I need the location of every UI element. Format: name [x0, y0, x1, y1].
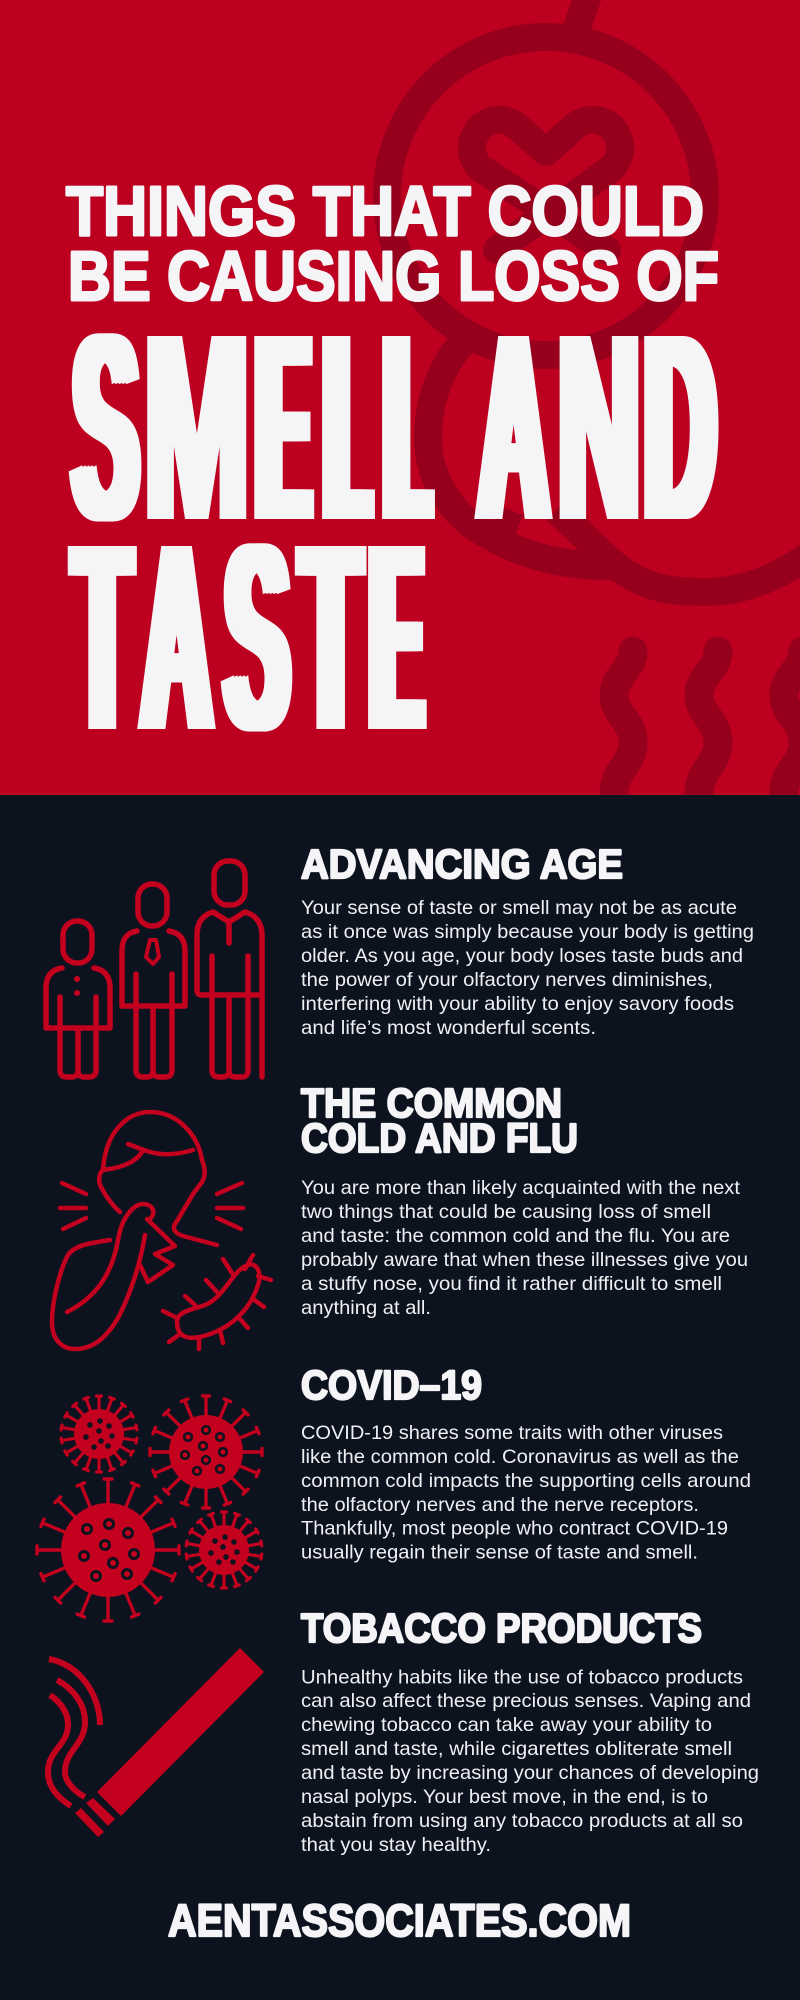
title: A	[142, 489, 211, 786]
text: tobacco products body: Unhealthy habits like the use of tobacco products	[301, 1666, 743, 1688]
heading: the common cold and flu: COLD AND FLU	[301, 1115, 578, 1161]
text: covid-19 body: Thankfully, most people who contract COVID-19	[301, 1518, 728, 1540]
text: tobacco products body: smell and taste, while cigarettes obliterate smell	[301, 1738, 732, 1760]
icon: coronavirus particles	[37, 1396, 262, 1621]
text: cold and flu body: two things that could be causing loss of smell	[301, 1201, 711, 1223]
text: cold and flu body	[301, 1177, 748, 1319]
title: L	[327, 279, 367, 576]
text: covid-19 body: like the common cold. Coronavirus as well as the	[301, 1446, 739, 1468]
text: covid-19 body: common cold impacts the supporting cells around	[301, 1470, 751, 1492]
text: tobacco products body: can also affect these precious senses. Vaping and	[301, 1690, 751, 1712]
title: THINGS THAT COULD	[66, 172, 704, 250]
text: cold and flu body: probably aware that when these illnesses give you	[301, 1249, 748, 1271]
heading: advancing age: ADVANCING AGE	[301, 841, 623, 887]
text: cold and flu body: a stuffy nose, you find it rather difficult to smell	[301, 1273, 722, 1295]
text: advancing age body: older. As you age, your body loses taste buds and	[301, 945, 743, 967]
text: covid-19 body: the olfactory nerves and the nerve receptors.	[301, 1494, 699, 1516]
text: cold and flu body: and taste: the common cold and the flu. You are	[301, 1225, 730, 1247]
icon: person sneezing with bacterium	[52, 1112, 271, 1349]
text: covid-19 body	[301, 1422, 751, 1564]
text: tobacco products body: nasal polyps. Your best move, in the end, is to	[301, 1786, 708, 1808]
text: advancing age body: interfering with your ability to enjoy savory foods	[301, 993, 734, 1015]
text: tobacco products body: that you stay healthy.	[301, 1834, 491, 1856]
text: covid-19 body: COVID-19 shares some traits with other viruses	[301, 1422, 723, 1444]
heading: the common cold and flu	[301, 1080, 578, 1161]
heading: tobacco products: TOBACCO PRODUCTS	[301, 1605, 702, 1651]
background motif: nose and smell waves	[373, 0, 800, 795]
title: N	[558, 279, 640, 576]
panel: red header	[0, 0, 800, 795]
text: covid-19 body: usually regain their sense of taste and smell.	[301, 1542, 698, 1564]
text: tobacco products body: chewing tobacco can take away your ability to	[301, 1714, 712, 1736]
panel: dark content area	[0, 795, 800, 2000]
icon: three people of different ages	[46, 861, 262, 1077]
text: cold and flu body: anything at all.	[301, 1297, 431, 1319]
text: advancing age body: as it once was simply because your body is getting	[301, 921, 754, 943]
title: S	[73, 279, 138, 576]
title: A	[479, 279, 548, 576]
text: advancing age body: and life’s most wonderful scents.	[301, 1017, 596, 1039]
text: advancing age body: Your sense of taste or smell may not be as acute	[301, 897, 737, 919]
text: advancing age body: the power of your olfactory nerves diminishes,	[301, 969, 713, 991]
title: D	[645, 279, 716, 576]
footer: website: AENTASSOCIATES.COM	[168, 1895, 631, 1946]
text: advancing age body	[301, 897, 754, 1039]
title: T	[300, 489, 360, 786]
heading: the common cold and flu: THE COMMON	[301, 1080, 562, 1126]
text: tobacco products body: abstain from using any tobacco products at all so	[301, 1810, 743, 1832]
title: E	[258, 279, 309, 576]
text: tobacco products body: and taste by increasing your chances of developing	[301, 1762, 759, 1784]
title: S	[225, 489, 289, 786]
text: tobacco products body	[301, 1666, 759, 1856]
title	[65, 172, 719, 786]
heading: covid-19: COVID–19	[301, 1362, 482, 1408]
title: E	[372, 489, 420, 786]
title: L	[387, 279, 427, 576]
title: M	[144, 279, 250, 576]
title: T	[74, 489, 130, 786]
text: cold and flu body: You are more than likely acquainted with the next	[301, 1177, 741, 1199]
icon: cigarette with smoke	[48, 1648, 264, 1837]
